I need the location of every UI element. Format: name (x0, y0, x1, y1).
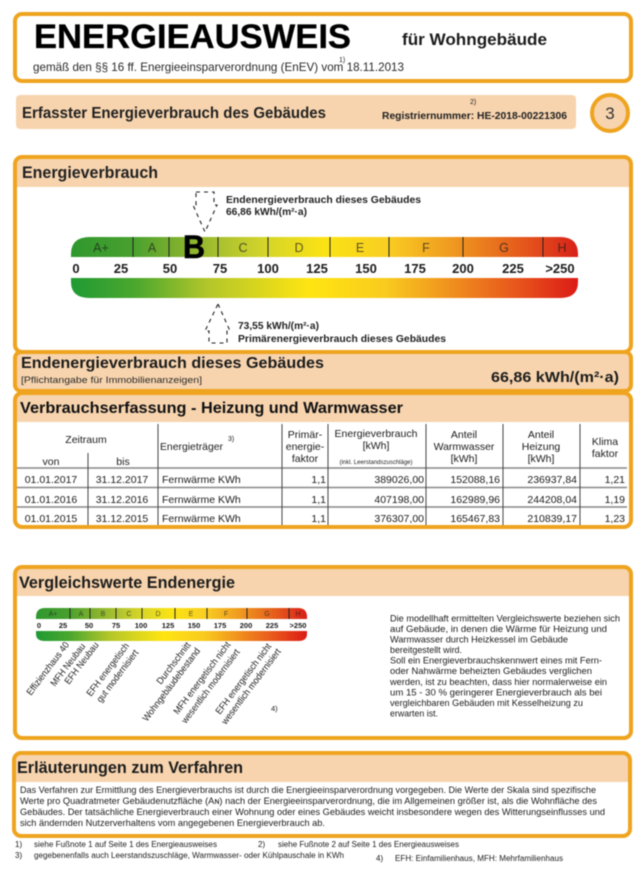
table header: Warmwasser (434, 441, 495, 453)
table header: Primär- (288, 429, 323, 441)
heading: Endenergieverbrauch dieses Gebäudes (21, 355, 324, 372)
explanatory paragraph: bereitgestellt wird. (390, 644, 462, 655)
small scale bar: H (295, 611, 301, 618)
table row 2016: 162989,96 (450, 494, 500, 506)
heading: Vergleichswerte Endenergie (19, 573, 235, 592)
table header: Energieverbrauch (335, 428, 418, 440)
table row 2017: 31.12.2017 (96, 474, 148, 486)
table row 2017: 236937,84 (527, 474, 577, 486)
table row 2015: 376307,00 (374, 513, 424, 525)
small scale bar: B (101, 611, 106, 618)
rotated building type labels: Wohngebäudebestand (141, 646, 203, 724)
small scale numbers: 200 (240, 621, 252, 630)
panel: mandatory value (15, 352, 631, 391)
explanatory paragraph: erwarten ist. (390, 707, 438, 718)
small scale numbers: 225 (266, 621, 278, 630)
footnotes: 4) (376, 854, 383, 863)
page number badge: 3 (605, 104, 615, 123)
heading: Energieverbrauch: Energieverbrauch (22, 164, 158, 182)
footnote mark 4: 4) (271, 704, 278, 713)
panel: consumption record table (15, 393, 631, 527)
table row 2015 (25, 513, 625, 525)
note: [Pflichtangabe für Immobilienanzeigen] (21, 375, 202, 385)
scale numbers: 200 (452, 261, 474, 276)
small scale numbers (37, 621, 306, 630)
subheading: für Wohngebäude: für Wohngebäude (402, 30, 547, 49)
legal reference: gemäß den §§ 16 ff. Energieeinsparverordnung (EnEV) vom 18.11.2013 (33, 60, 404, 74)
footnotes: siehe Fußnote 1 auf Seite 1 des Energieausweises (34, 840, 217, 849)
footnote mark 2: 2) (470, 99, 476, 106)
label: final energy: 66,86 kWh/(m²·a) (226, 207, 307, 218)
footnotes: 3) (15, 851, 22, 860)
scale bar with energy classes: G (499, 241, 509, 255)
table row 2016: 01.01.2016 (25, 494, 77, 506)
small scale numbers: 150 (188, 621, 200, 630)
registration number: Registriernummer: HE-2018-00221306 (382, 110, 567, 122)
table header: [kWh] (363, 440, 389, 452)
rotated building type labels: Effizienzhaus 40 (25, 640, 72, 698)
explanatory paragraph: werden, ist zu beachten, dass hier normalerweise ein (389, 676, 607, 687)
table header: [kWh] (528, 453, 554, 465)
small scale numbers: >250 (290, 621, 306, 630)
heading: Erläuterungen zum Verfahren (17, 758, 243, 777)
panel: title (15, 14, 631, 81)
table row 2016: 244208,04 (527, 494, 577, 506)
small scale numbers: 25 (59, 621, 67, 630)
heading: Verbrauchserfassung - Heizung und Warmwasser (20, 400, 403, 417)
table header: Klima (592, 436, 618, 448)
small scale numbers: 0 (37, 621, 41, 630)
class marker B: B (183, 229, 205, 265)
table header: faktor (292, 453, 319, 465)
explanatory paragraph: auf Gebäude, in denen die Wärme für Heizung und (390, 623, 607, 634)
label: primary energy: 73,55 kWh/(m²·a) (238, 321, 319, 332)
table row 2015: 165467,83 (450, 513, 500, 525)
explanatory paragraph: Soll ein Energieverbrauchskennwert eines mit Fern- (390, 655, 602, 666)
rotated building type labels: gut modernisiert (95, 648, 142, 705)
scale numbers: 100 (257, 261, 279, 276)
scale numbers: 75 (213, 261, 227, 276)
table grid (17, 424, 627, 525)
explanatory paragraph: oder Nahwärme beheizten Gebäudes verglichen (390, 665, 592, 676)
rotated building type labels: Durchschnitt (155, 640, 194, 687)
scale numbers: 125 (306, 261, 328, 276)
rotated building type labels: MFH Neubau (49, 641, 88, 689)
small scale bar (36, 608, 307, 619)
rotated building type labels: EFH energetisch (85, 641, 132, 699)
label: final energy (226, 195, 421, 218)
label: primary energy (238, 321, 446, 345)
explanatory paragraph: vergleichbaren Gebäuden mit Kesselheizung zu (390, 697, 583, 708)
table row 2017: 01.01.2017 (25, 474, 77, 486)
footnotes: EFH: Einfamilienhaus, MFH: Mehrfamilienhaus (395, 854, 563, 863)
scale bar with energy classes: F (422, 241, 430, 255)
table row 2016: 407198,00 (374, 494, 424, 506)
table row 2016: 31.12.2016 (96, 494, 148, 506)
scale numbers: >250 (545, 261, 575, 276)
scale numbers: 50 (163, 261, 177, 276)
rotated building type labels: EFH energetisch nicht (214, 641, 274, 717)
footnotes: gegebenenfalls auch Leerstandszuschläge, Warmwasser- oder Kühlpauschale in KWh (34, 851, 344, 860)
footnotes (15, 840, 563, 863)
table row 2017: 389026,00 (374, 474, 424, 486)
table row 2017: 1,21 (605, 474, 625, 486)
scale numbers: 0 (72, 261, 80, 276)
table row 2017: Fernwärme KWh (162, 474, 241, 486)
table row 2015: 1,23 (605, 513, 625, 525)
rotated building type labels: MFH energetisch nicht (172, 640, 234, 717)
rotated building type labels (25, 640, 284, 728)
table row 2015: 210839,17 (527, 513, 577, 525)
small scale bar: C (126, 611, 132, 618)
value: 66,86 kWh/(m²·a) (491, 369, 619, 386)
small scale numbers: 125 (162, 621, 174, 630)
table row 2016: 1,1 (311, 494, 326, 506)
band: recorded consumption and registration number (16, 95, 576, 129)
explanatory paragraph: Warmwasser durch Heizkessel im Gebäude (390, 634, 568, 645)
table row 2016: 1,19 (605, 494, 625, 506)
table row 2015: 31.12.2015 (96, 513, 148, 525)
explanation text: Werte pro Quadratmeter Gebäudenutzfläche (Aɴ) nach der Energieeinsparverordnung, die im Allgemeinen größer ist, als die Wohnfläche des (20, 796, 597, 807)
footnotes: 1) (15, 840, 22, 849)
scale numbers: 225 (502, 261, 524, 276)
table row 2016 (25, 494, 625, 506)
table header: bis (116, 456, 130, 468)
table header: energie- (286, 441, 325, 453)
panel: explanation of procedure (14, 753, 630, 836)
arrow: primary energy marker (205, 304, 230, 343)
small scale numbers: 50 (85, 621, 93, 630)
footnote mark 1: 1) (339, 57, 345, 64)
table header: Heizung (522, 441, 560, 453)
small scale bar: D (155, 611, 161, 618)
small scale bar: A+ (49, 611, 57, 618)
small scale numbers: 175 (214, 621, 226, 630)
gradient bar (71, 278, 578, 298)
scale bar with energy classes: E (356, 241, 364, 255)
scale bar with energy classes: A (148, 241, 157, 255)
small scale bar: G (264, 611, 270, 618)
rotated building type labels: wesentlich modernisiert (219, 646, 284, 728)
page number badge (592, 95, 628, 131)
label: final energy: Endenergieverbrauch dieses Gebäudes (226, 195, 421, 206)
small gradient bar (36, 631, 307, 641)
table header: 3) (228, 436, 234, 443)
small scale numbers: 75 (112, 621, 120, 630)
table row 2017: 152088,16 (450, 474, 500, 486)
table row 2015: Fernwärme KWh (162, 513, 241, 525)
arrow: final energy marker (193, 192, 217, 232)
small scale bar: E (189, 611, 194, 618)
explanation text: sich ändernden Nutzerverhaltens vom angegebenen Energieverbrauch ab. (20, 818, 325, 829)
panel: Energieverbrauch (15, 157, 631, 352)
scale bar with energy classes: D (294, 241, 304, 255)
rotated building type labels: EFH Neubau (63, 640, 101, 687)
table header: von (43, 456, 60, 468)
explanation text: Das Verfahren zur Ermittlung des Energieverbrauchs ist durch die Energieeinsparverordnung vorgegeben. Die Werte der Skala sind spezifische (20, 785, 596, 796)
label: primary energy: Primärenergieverbrauch dieses Gebäudes (238, 334, 446, 345)
table row 2015: 01.01.2015 (25, 513, 77, 525)
scale bar with energy classes (71, 229, 578, 265)
scale numbers (72, 261, 575, 276)
band heading: Erfasster Energieverbrauch des Gebäudes (22, 105, 326, 122)
table header: faktor (592, 448, 619, 460)
table header (43, 428, 619, 468)
small scale bar: F (224, 611, 228, 618)
table row 2017: 1,1 (311, 474, 326, 486)
explanation text: Gebäudes. Der tatsächliche Energieverbrauch einer Wohnung oder eines Gebäudes weicht insbesondere wegen des Witterungseinflusses und (20, 807, 605, 818)
scale numbers: 25 (114, 261, 128, 276)
explanatory paragraph: Die modellhaft ermittelten Vergleichswerte beziehen sich (390, 612, 620, 624)
small scale numbers: 100 (135, 621, 147, 630)
small scale bar: A (79, 611, 84, 618)
table header: Energieträger (160, 441, 223, 453)
scale numbers: 150 (355, 261, 377, 276)
footnotes: siehe Fußnote 2 auf Seite 1 des Energieausweises (278, 840, 459, 849)
table row 2016: Fernwärme KWh (162, 494, 241, 506)
scale bar with energy classes: H (557, 241, 567, 255)
table header: (inkl. Leerstandszuschläge) (339, 460, 413, 466)
scale numbers: 175 (404, 261, 426, 276)
explanatory paragraph: um 15 - 30 % geringerer Energieverbrauch als bei (390, 686, 602, 697)
table row 2017 (25, 474, 625, 486)
heading: Energieausweis: ENERGIEAUSWEIS (34, 18, 351, 56)
explanatory paragraph (389, 612, 620, 718)
table row 2015: 1,1 (311, 513, 326, 525)
explanation text (20, 785, 605, 829)
table header: Zeitraum (65, 434, 107, 446)
scale bar with energy classes: A+ (93, 241, 109, 255)
table header: Anteil (451, 429, 477, 441)
footnotes: 2) (258, 840, 265, 849)
scale bar with energy classes: C (238, 241, 248, 255)
table header: [kWh] (451, 453, 477, 465)
table header: Anteil (528, 429, 554, 441)
panel: comparison values (15, 567, 631, 738)
rotated building type labels: wesentlich modernisiert (179, 647, 243, 727)
